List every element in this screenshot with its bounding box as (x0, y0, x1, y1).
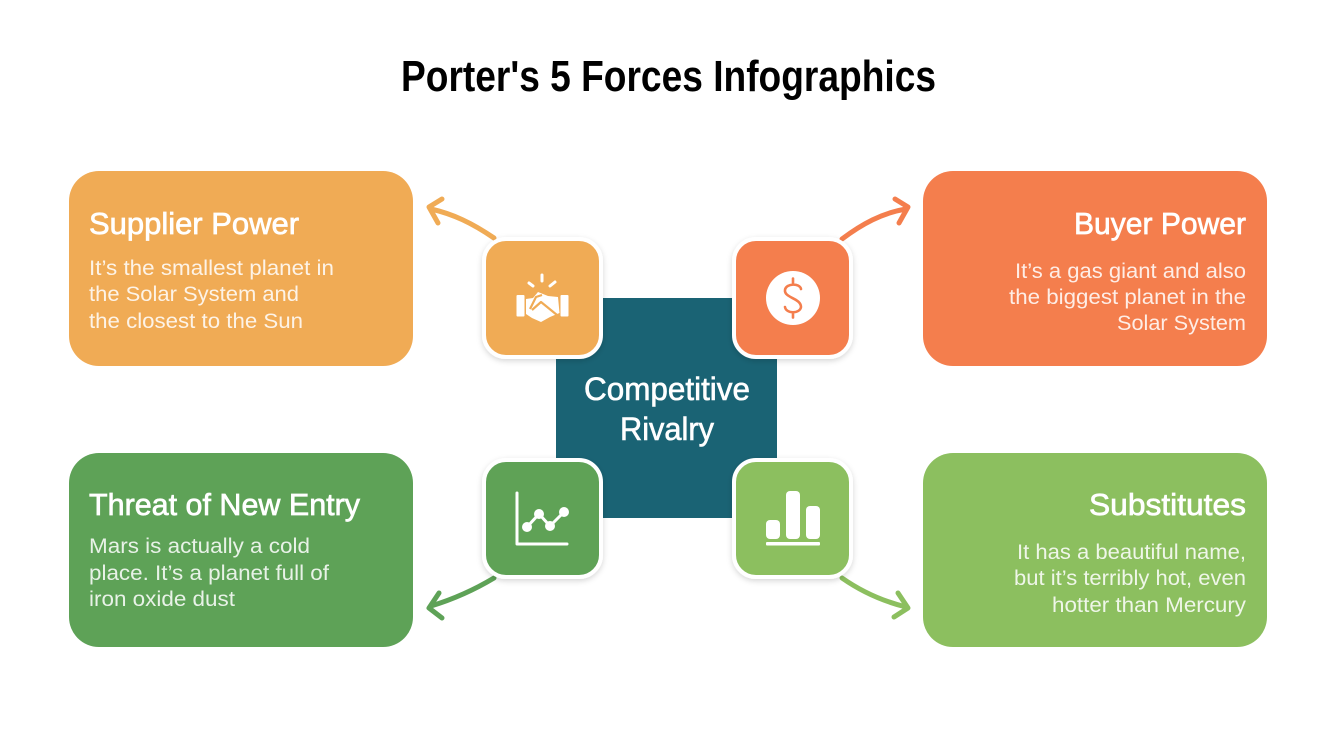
text: buyer power description (1009, 260, 1246, 335)
panel: threat of new entry (69, 453, 413, 647)
heading: supplier power: Supplier Power (89, 206, 299, 241)
arrow: to buyer power (842, 199, 908, 239)
icon: line chart (517, 493, 569, 544)
center panel: competitive rivalry (556, 298, 777, 518)
arrow: to threat of new entry (429, 578, 494, 618)
text: supplier power description (89, 257, 334, 333)
text: supplier power description: the closest to the Sun (89, 310, 303, 333)
text: threat of new entry description: iron oxide dust (89, 588, 235, 611)
text: supplier power description: It’s the smallest planet in (89, 257, 334, 280)
text: threat of new entry description (89, 535, 329, 611)
text: substitutes description: hotter than Mercury (1052, 594, 1247, 617)
title: Porter's 5 Forces Infographics (401, 52, 936, 101)
text: buyer power description: Solar System (1117, 312, 1246, 335)
panel: substitutes (923, 453, 1267, 647)
icon: bar chart (766, 491, 820, 546)
panel: supplier power (69, 171, 413, 366)
text: substitutes description: It has a beautiful name, (1017, 541, 1246, 564)
text: substitutes description: but it’s terribly hot, even (1014, 567, 1246, 590)
heading: substitutes: Substitutes (1089, 487, 1246, 522)
text: substitutes description (1014, 541, 1247, 617)
arrow: to supplier power (429, 199, 494, 238)
panel: buyer power (923, 171, 1267, 366)
icon box: dollar (734, 239, 851, 357)
heading: threat of new entry: Threat of New Entry (89, 487, 360, 522)
heading: buyer power: Buyer Power (1074, 206, 1246, 241)
text: buyer power description: the biggest planet in the (1009, 286, 1246, 309)
arrow: to substitutes (842, 578, 908, 617)
icon box: bar chart (734, 460, 851, 577)
center panel: competitive rivalry: Rivalry (620, 411, 714, 447)
text: supplier power description: the Solar System and (89, 283, 299, 306)
text: buyer power description: It’s a gas giant and also (1015, 260, 1246, 283)
icon box: handshake (484, 239, 601, 357)
icon: handshake (516, 275, 568, 322)
icon: dollar coin (766, 271, 820, 325)
text: threat of new entry description: Mars is actually a cold (89, 535, 310, 558)
text: threat of new entry description: place. It’s a planet full of (89, 562, 329, 585)
center panel: competitive rivalry: Competitive (584, 371, 750, 407)
icon box: line chart (484, 460, 601, 577)
